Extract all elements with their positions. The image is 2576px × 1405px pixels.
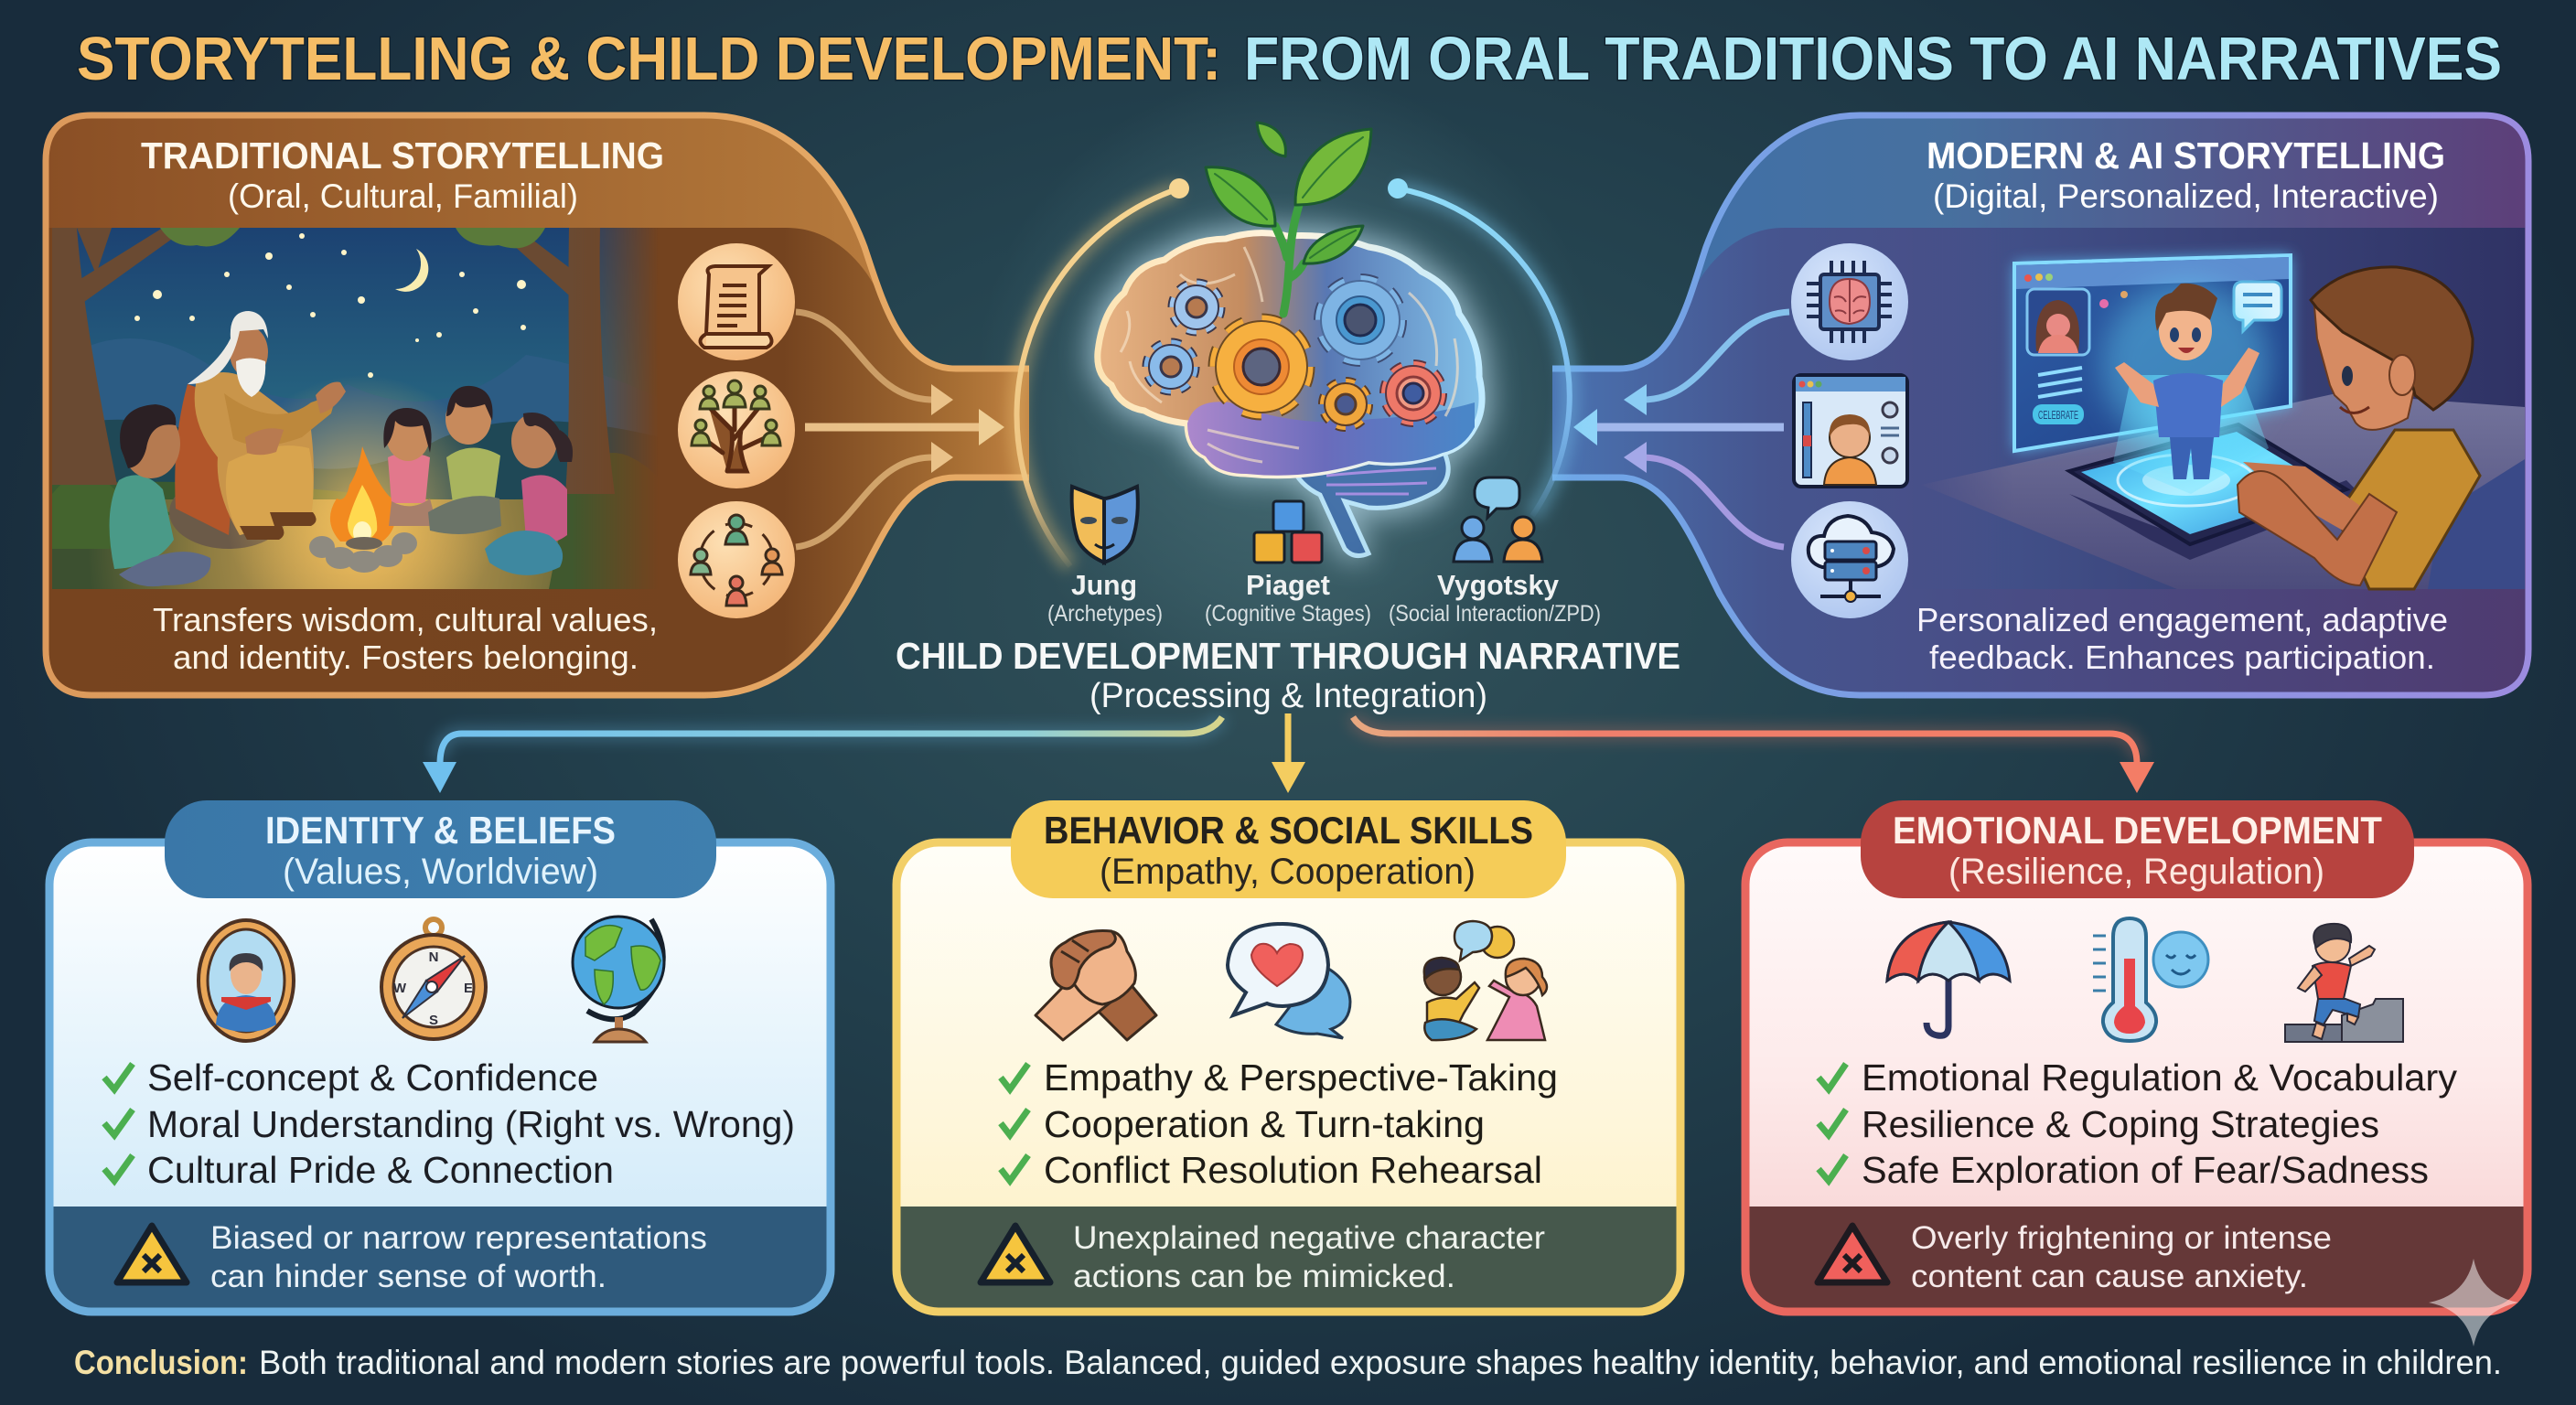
icon: thermometer and calm face <box>2093 918 2208 1041</box>
heading: child development <box>896 635 1680 715</box>
tablet <box>2069 480 2360 560</box>
flow arrows: traditional inputs <box>796 312 1004 547</box>
checklist: Self-concept & Confidence <box>147 1056 598 1099</box>
trees <box>52 228 117 485</box>
checklist: Conflict Resolution Rehearsal <box>1044 1149 1542 1191</box>
heading: MODERN & AI STORYTELLING <box>1927 134 2445 177</box>
hologram beam and glow <box>2113 375 2269 494</box>
panel: behavior & social skills <box>896 800 1680 1316</box>
text block: Personalized engagement, adaptive <box>1916 601 2448 638</box>
illustration: child with AI story tablet: CELEBRATE <box>2038 408 2078 422</box>
icon: brain with gears <box>1089 224 1491 558</box>
header pill: (Resilience, Regulation) <box>1948 852 2324 892</box>
warning callout <box>981 1220 1545 1294</box>
icon: umbrella <box>1887 922 2010 1035</box>
checklist: Moral Understanding (Right vs. Wrong) <box>147 1103 795 1145</box>
header pill: IDENTITY & BELIEFS <box>265 809 616 852</box>
conclusion: Both traditional and modern stories are powerful tools. Balanced, guided exposure shapes healthy identity, behavior, and emotional resilience in children. <box>259 1344 2502 1381</box>
header pill: BEHAVIOR & SOCIAL SKILLS <box>1044 809 1533 852</box>
icon: family tree <box>678 371 795 488</box>
warning callout: Unexplained negative character <box>1073 1220 1545 1256</box>
icon: empathy speech bubbles <box>1228 924 1350 1038</box>
checklist: Resilience & Coping Strategies <box>1862 1103 2379 1145</box>
icon: child climbing <box>2285 924 2403 1042</box>
warning callout: actions can be mimicked. <box>1073 1259 1455 1294</box>
warning band <box>49 1207 831 1316</box>
gear: small orange <box>1324 382 1368 426</box>
icon: Piaget blocks <box>1254 501 1322 563</box>
theorist labels: (Archetypes) <box>1047 601 1163 627</box>
heading: TRADITIONAL STORYTELLING <box>141 134 664 177</box>
text block: Transfers wisdom, cultural values, <box>153 601 658 638</box>
warning callout: can hinder sense of worth. <box>210 1259 606 1294</box>
gear: small blue left <box>1148 344 1194 390</box>
child 3 <box>446 447 500 503</box>
child 2 <box>388 453 430 503</box>
child 4 <box>521 475 567 543</box>
arrow: to emotional <box>1353 717 2154 793</box>
title <box>77 25 2502 93</box>
theorist labels <box>1047 569 1601 627</box>
heading: (Digital, Personalized, Interactive) <box>1933 177 2439 215</box>
gear: red <box>1385 365 1442 422</box>
theorist labels: (Cognitive Stages) <box>1205 601 1371 627</box>
icon: cloud server <box>1791 501 1908 618</box>
theorist labels: Piaget <box>1246 569 1330 601</box>
text block <box>1916 601 2448 676</box>
heading <box>1927 134 2445 215</box>
warning callout <box>1818 1220 2332 1294</box>
conclusion: Conclusion: <box>74 1344 248 1381</box>
outline <box>1552 115 2528 695</box>
theorist labels: (Social Interaction/ZPD) <box>1389 601 1601 627</box>
panel: identity & beliefs <box>49 800 831 1316</box>
warning callout: Overly frightening or intense <box>1911 1220 2332 1256</box>
header pill: (Empathy, Cooperation) <box>1100 852 1476 892</box>
fire glow <box>237 382 481 589</box>
icon: clasped hands <box>1036 931 1156 1040</box>
icon: globe <box>573 917 664 1042</box>
checklist <box>104 1056 795 1191</box>
warning band <box>896 1207 1680 1316</box>
checklist <box>1819 1056 2457 1191</box>
title: STORYTELLING & CHILD DEVELOPMENT: <box>77 25 1221 93</box>
central brain hub <box>896 123 1680 715</box>
panel: emotional development <box>1745 800 2528 1316</box>
checklist: Empathy & Perspective-Taking <box>1044 1056 1558 1099</box>
header pill: EMOTIONAL DEVELOPMENT <box>1893 809 2382 852</box>
hologram child <box>2153 373 2223 437</box>
heading: (Oral, Cultural, Familial) <box>228 177 578 215</box>
moon <box>395 249 428 292</box>
icon: children talking <box>1424 921 1547 1040</box>
icon: compass: E <box>464 981 473 996</box>
icon: adaptive interface window <box>1794 375 1907 487</box>
rock seat <box>169 497 284 549</box>
child <box>2336 430 2480 589</box>
warning callout <box>117 1220 707 1294</box>
icon: compass: S <box>429 1013 438 1028</box>
icon: community circle <box>678 501 795 618</box>
heading <box>141 134 664 215</box>
checklist: Emotional Regulation & Vocabulary <box>1862 1056 2457 1099</box>
icon: mirror <box>199 920 294 1041</box>
campfire <box>330 446 395 542</box>
child left <box>110 475 174 569</box>
screen <box>2014 255 2291 451</box>
header pill <box>165 800 716 898</box>
text block: and identity. Fosters belonging. <box>173 638 639 676</box>
outline <box>46 115 1029 695</box>
icon: scroll <box>678 243 795 360</box>
title: FROM ORAL TRADITIONS TO AI NARRATIVES <box>1244 25 2502 93</box>
checklist: Cultural Pride & Connection <box>147 1149 614 1191</box>
flow arrows: modern inputs <box>1573 312 1789 547</box>
icon: AI brain chip <box>1791 243 1908 360</box>
warning callout: Biased or narrow representations <box>210 1220 707 1256</box>
icon: compass: W <box>393 981 407 996</box>
heading: child development: (Processing & Integration) <box>1089 677 1487 715</box>
gear: large orange <box>1215 320 1308 413</box>
illustration: child with AI story tablet <box>1907 228 2525 589</box>
icon: compass <box>381 919 486 1039</box>
icon: compass: N <box>429 949 438 965</box>
header pill <box>1011 800 1566 898</box>
text block: feedback. Enhances participation. <box>1929 638 2435 676</box>
chair <box>2428 459 2525 589</box>
icon: Vygotsky social interaction <box>1454 477 1542 562</box>
panel: modern & AI storytelling <box>1552 115 2534 713</box>
heading: child development: CHILD DEVELOPMENT THROUGH NARRATIVE <box>896 635 1680 677</box>
arc: blue ring <box>1388 178 1570 516</box>
checklist: Cooperation & Turn-taking <box>1044 1103 1485 1145</box>
warning band <box>1745 1207 2528 1316</box>
elder <box>175 384 231 535</box>
gear: large blue <box>1320 280 1401 360</box>
header pill <box>1861 800 2414 898</box>
gear: small blue top left <box>1174 284 1219 330</box>
checklist <box>1001 1056 1558 1191</box>
header pill: (Values, Worldview) <box>283 852 598 892</box>
arrow: to identity <box>423 717 1222 793</box>
panel: traditional storytelling <box>46 115 1029 713</box>
arc: yellow ring <box>1017 178 1189 566</box>
theorist labels: Jung <box>1071 569 1137 601</box>
checklist: Safe Exploration of Fear/Sadness <box>1862 1149 2429 1191</box>
text block <box>153 601 658 676</box>
icon: sprouting plant <box>1206 123 1371 314</box>
theorist labels: Vygotsky <box>1437 569 1560 601</box>
illustration: elder telling stories by campfire <box>52 228 674 589</box>
icon: sparkle watermark <box>2429 1259 2518 1346</box>
arrow: to behavior <box>1272 713 1305 793</box>
warning callout: content can cause anxiety. <box>1911 1259 2308 1294</box>
icon: Jung mask <box>1072 487 1138 563</box>
